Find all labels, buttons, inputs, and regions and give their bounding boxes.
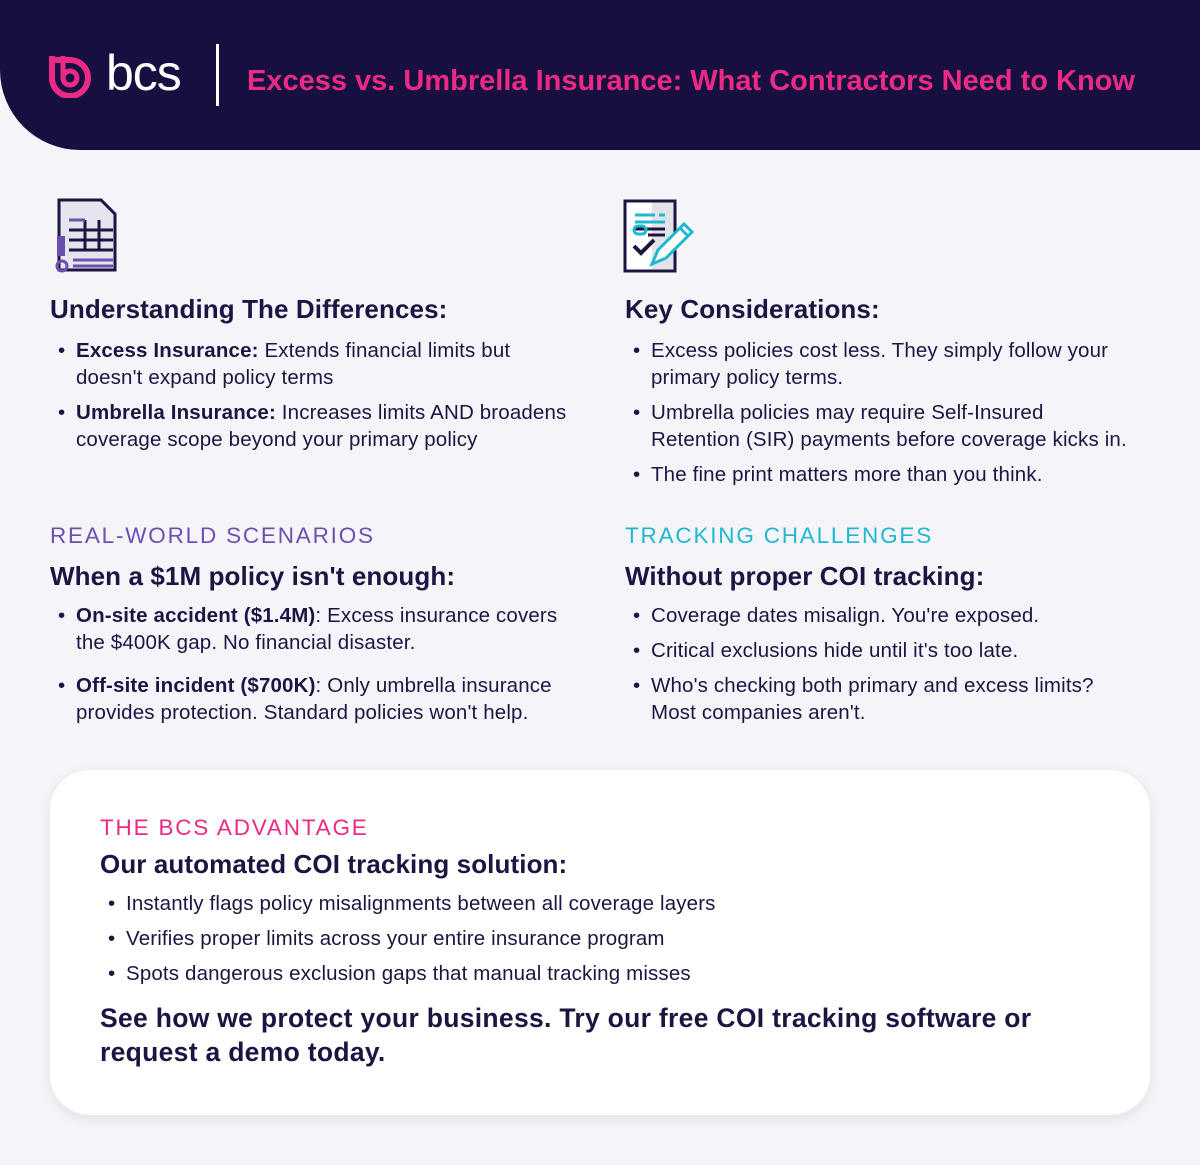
panel: key considerations: Key Considerations: — [625, 294, 880, 324]
panel: understanding: coverage scope beyond your primary policy — [76, 428, 478, 451]
panel: scenarios: When a $1M policy isn't enough: — [50, 561, 455, 591]
logo — [49, 45, 181, 101]
logo: bcs — [106, 45, 181, 101]
title: Excess vs. Umbrella Insurance: What Contractors Need to Know — [247, 65, 1135, 97]
panel: bcs advantage card: request a demo today. — [100, 1037, 386, 1067]
panel: scenarios: provides protection. Standard policies won't help. — [76, 701, 528, 724]
panel: bcs advantage card: THE BCS ADVANTAGE — [100, 815, 369, 840]
panel: bcs advantage card — [50, 770, 1150, 1115]
panel: bcs advantage card: See how we protect your business. Try our free COI tracking software or — [100, 1003, 1031, 1033]
panel: key considerations: Umbrella policies may require Self-Insured — [651, 401, 1044, 424]
panel: scenarios — [50, 523, 557, 724]
panel: scenarios: the $400K gap. No financial disaster. — [76, 631, 415, 654]
panel: bcs advantage card: Spots dangerous exclusion gaps that manual tracking misses — [126, 962, 691, 985]
panel: tracking — [625, 523, 1094, 724]
header bar — [0, 0, 1200, 150]
panel: tracking: Most companies aren't. — [651, 701, 866, 724]
panel: bcs advantage card: Instantly flags policy misalignments between all coverage layers — [126, 892, 716, 915]
panel: tracking: Without proper COI tracking: — [625, 561, 984, 591]
panel: key considerations: The fine print matters more than you think. — [651, 463, 1043, 486]
panel: understanding: Understanding The Differences: — [50, 294, 447, 324]
panel: understanding — [50, 294, 566, 451]
panel: tracking: TRACKING CHALLENGES — [625, 523, 933, 548]
panel: scenarios: Off-site incident ($700K): Only umbrella insurance — [76, 674, 552, 697]
icon: document — [56, 198, 116, 272]
panel: key considerations: primary policy terms. — [651, 366, 843, 389]
panel: tracking: Who's checking both primary and excess limits? — [651, 674, 1094, 697]
panel: tracking: Critical exclusions hide until it's too late. — [651, 639, 1018, 662]
panel: tracking: Coverage dates misalign. You're exposed. — [651, 604, 1039, 627]
panel: bcs advantage card: Our automated COI tracking solution: — [100, 849, 567, 879]
panel: bcs advantage card: Verifies proper limits across your entire insurance program — [126, 927, 665, 950]
panel: scenarios: REAL-WORLD SCENARIOS — [50, 523, 375, 548]
icon: checklist with pen — [624, 200, 694, 272]
panel: scenarios: On-site accident ($1.4M): Excess insurance covers — [76, 604, 557, 627]
panel: key considerations: Excess policies cost less. They simply follow your — [651, 339, 1108, 362]
panel: key considerations — [625, 294, 1127, 486]
panel: understanding: Umbrella Insurance: Increases limits AND broadens — [76, 401, 566, 424]
panel: key considerations: Retention (SIR) payments before coverage kicks in. — [651, 428, 1127, 451]
panel: understanding: doesn't expand policy terms — [76, 366, 334, 389]
panel: understanding: Excess Insurance: Extends financial limits but — [76, 339, 510, 362]
